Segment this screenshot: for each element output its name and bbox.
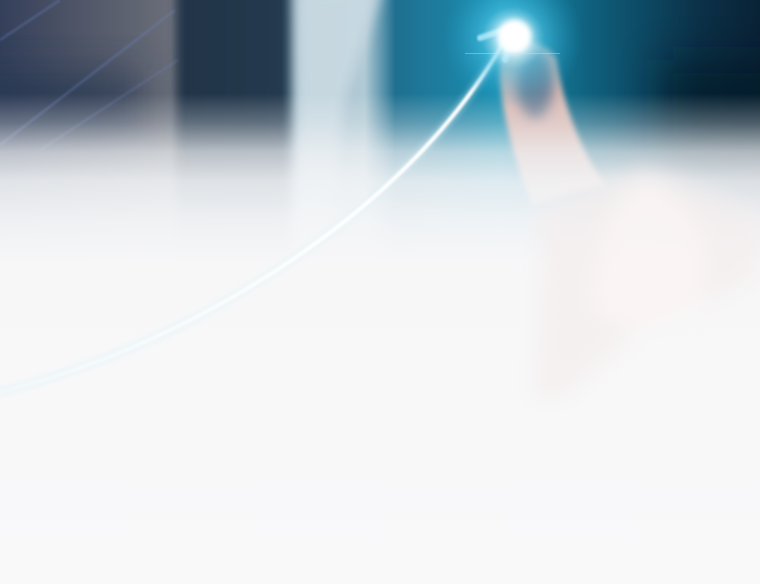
glowing fingertip light	[443, 0, 583, 108]
raised finger	[500, 42, 605, 205]
faint hand visible through the fade	[533, 168, 760, 399]
dark photographic backdrop	[0, 0, 760, 300]
diagonal light streaks	[0, 0, 178, 150]
rising arrow	[0, 27, 512, 392]
